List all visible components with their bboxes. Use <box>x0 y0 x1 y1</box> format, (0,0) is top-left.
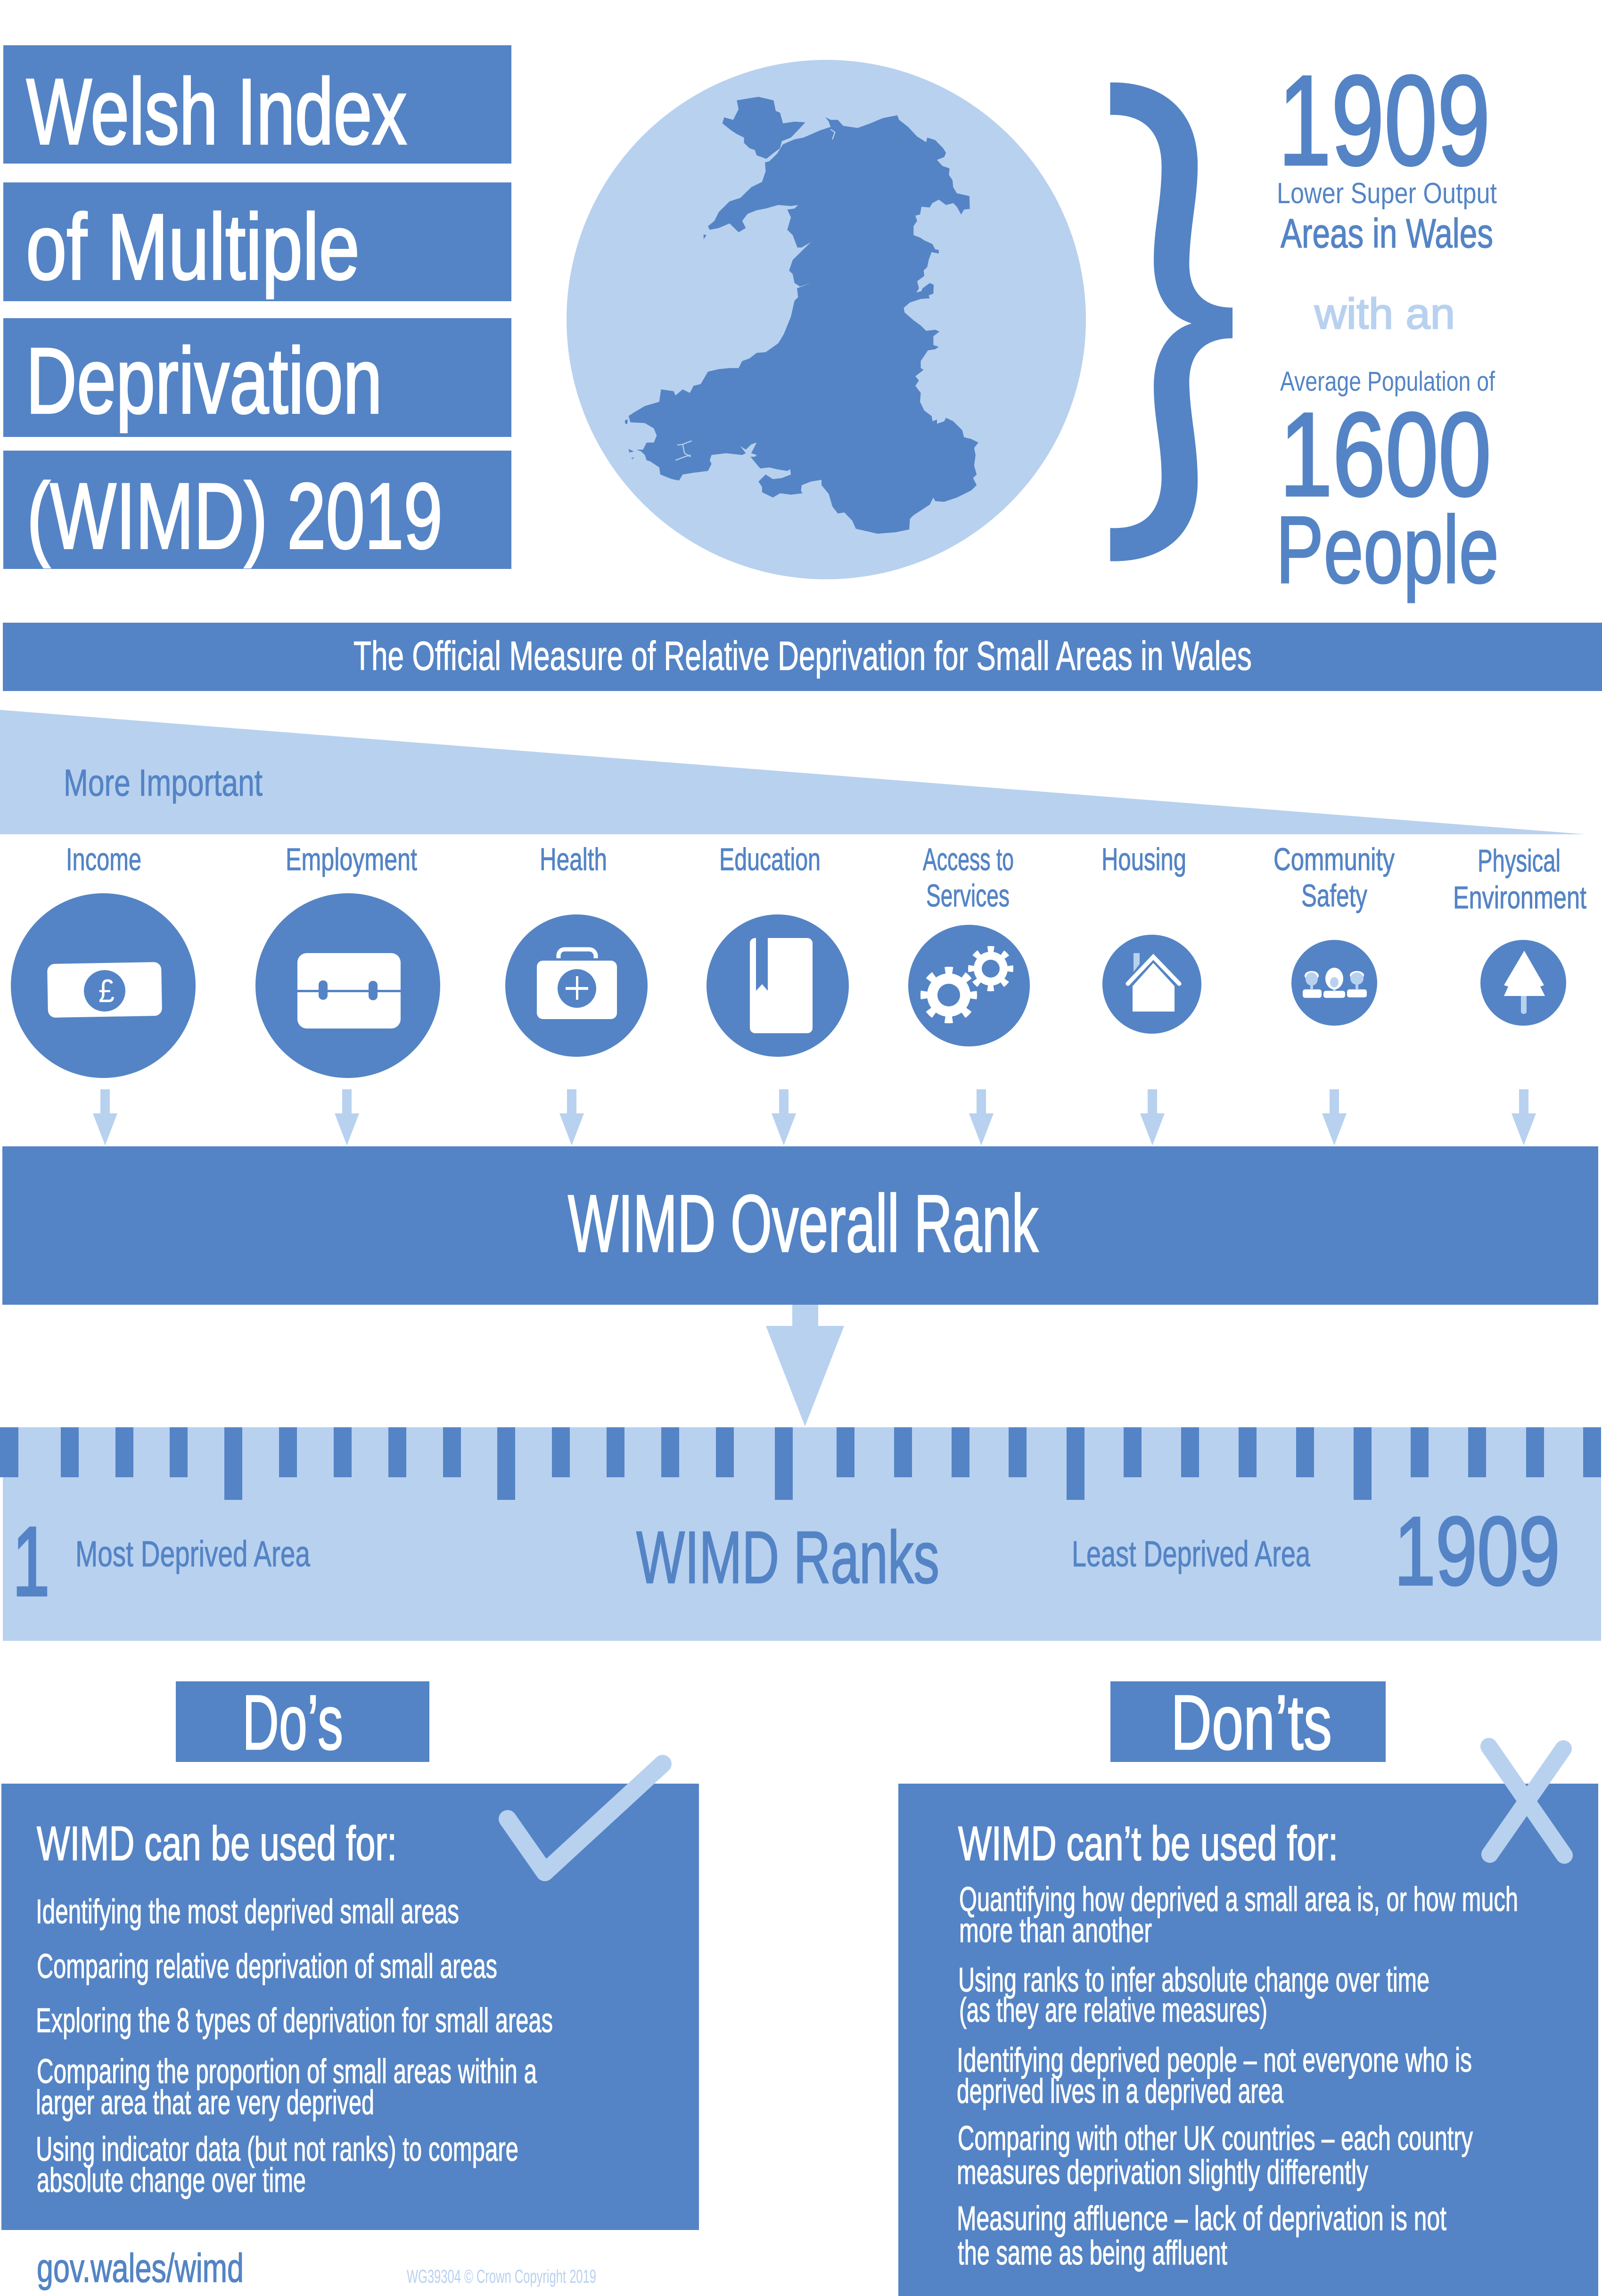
website link: gov.wales/wimd <box>37 2246 244 2291</box>
icon: banknote: £ <box>99 972 115 1009</box>
domain: Access to Services: Access to <box>923 842 1014 877</box>
key statistics text <box>1276 49 1499 603</box>
rank 1: 1 <box>13 1507 49 1616</box>
icon: cross <box>1489 1746 1564 1855</box>
icon: check mark <box>508 1764 663 1872</box>
title block <box>3 45 511 569</box>
list of uses: Identifying the most deprived small areas <box>36 1893 459 1931</box>
domain: Physical Environment <box>1453 843 1586 1145</box>
title line: Deprivation: Deprivation <box>26 329 382 433</box>
list of non-uses: measures deprivation slightly differently <box>957 2154 1368 2191</box>
list of uses: Using indicator data (but not ranks) to compare <box>36 2131 518 2168</box>
icon: gears <box>908 925 1030 1046</box>
list of non-uses <box>957 1881 1518 2272</box>
icon: briefcase <box>255 893 440 1078</box>
label: most deprived: Most Deprived Area <box>75 1534 310 1574</box>
domain: Access to Services <box>908 842 1030 1145</box>
text: with an: with an <box>1314 290 1455 338</box>
large arrow to ruler <box>766 1305 844 1426</box>
text: Areas in Wales: Areas in Wales <box>1281 211 1493 256</box>
subtitle banner <box>3 623 1602 691</box>
list of non-uses: (as they are relative measures) <box>959 1992 1267 2029</box>
text: People: People <box>1276 496 1499 603</box>
overall rank bar: WIMD Overall Rank <box>568 1178 1039 1269</box>
domain: Employment <box>255 842 440 1145</box>
domain: Housing <box>1101 842 1201 1145</box>
domain: Education: Education <box>719 842 821 877</box>
rank ruler <box>0 1427 1601 1641</box>
heading: WIMD Ranks: WIMD Ranks <box>636 1516 939 1599</box>
title line: (WIMD) 2019: (WIMD) 2019 <box>27 464 443 568</box>
list of uses <box>36 1893 553 2199</box>
domain: Housing: Housing <box>1101 842 1186 877</box>
list of uses: Comparing relative deprivation of small areas <box>37 1948 497 1985</box>
map of Wales in circle <box>567 60 1086 579</box>
list of non-uses: the same as being affluent <box>958 2234 1227 2272</box>
icon: banknote <box>11 893 196 1078</box>
arrow <box>1140 1089 1165 1145</box>
icon: first aid kit <box>505 914 648 1057</box>
domain: Community Safety: Community <box>1273 842 1395 877</box>
stat: 1909: 1909 <box>1278 49 1490 192</box>
domain: Income <box>11 842 196 1145</box>
arrow <box>93 1089 117 1145</box>
list of uses: Comparing the proportion of small areas within a <box>37 2053 537 2090</box>
arrow <box>559 1089 584 1145</box>
domain: Income: Income <box>66 842 141 877</box>
icon: people <box>1291 940 1377 1026</box>
icon: tree <box>1480 940 1566 1026</box>
domain: Community Safety: Safety <box>1301 878 1367 913</box>
importance wedge: More Important <box>64 762 263 804</box>
heading: Don'ts: Don’ts <box>1171 1679 1332 1766</box>
subtitle banner: The Official Measure of Relative Deprivation for Small Areas in Wales <box>353 634 1252 679</box>
copyright note: WG39304 © Crown Copyright 2019 <box>407 2266 596 2287</box>
list of uses: absolute change over time <box>37 2162 306 2199</box>
text: Lower Super Output: Lower Super Output <box>1277 177 1497 210</box>
importance wedge <box>0 710 1586 834</box>
list of non-uses: more than another <box>959 1912 1152 1950</box>
panel heading: WIMD can’t be used for: <box>958 1817 1338 1870</box>
panel: do's <box>1 1764 699 2230</box>
domain: Access to Services: Services <box>926 878 1010 913</box>
domain: Education <box>707 842 849 1145</box>
title line: Welsh Index: Welsh Index <box>26 59 407 164</box>
arrow <box>335 1089 359 1145</box>
domain: Health: Health <box>540 842 607 877</box>
list of uses: larger area that are very deprived <box>36 2084 374 2122</box>
text: Average Population of: Average Population of <box>1280 366 1495 397</box>
panel: don'ts <box>898 1746 1598 2296</box>
curly brace <box>1110 82 1232 561</box>
arrow <box>969 1089 994 1145</box>
title line: of Multiple: of Multiple <box>26 195 360 299</box>
list of uses: Exploring the 8 types of deprivation for small areas <box>36 2002 553 2040</box>
domain: Employment: Employment <box>286 842 417 877</box>
domain: Physical Environment: Physical <box>1478 843 1561 879</box>
heading: Do's: Do’s <box>242 1679 343 1766</box>
stat: 1600: 1600 <box>1280 388 1491 521</box>
arrow <box>1322 1089 1347 1145</box>
label: least deprived: Least Deprived Area <box>1072 1534 1310 1574</box>
icon: house <box>1102 935 1201 1034</box>
overall rank bar <box>2 1146 1598 1305</box>
panel heading: WIMD can be used for: <box>37 1817 397 1870</box>
icon: book <box>707 914 849 1057</box>
list of non-uses: deprived lives in a deprived area <box>957 2073 1284 2110</box>
domain: Community Safety <box>1273 842 1395 1145</box>
domain: Health <box>505 842 648 1145</box>
arrow <box>772 1089 796 1145</box>
arrow <box>1512 1089 1536 1145</box>
heading: Do's <box>176 1679 429 1766</box>
